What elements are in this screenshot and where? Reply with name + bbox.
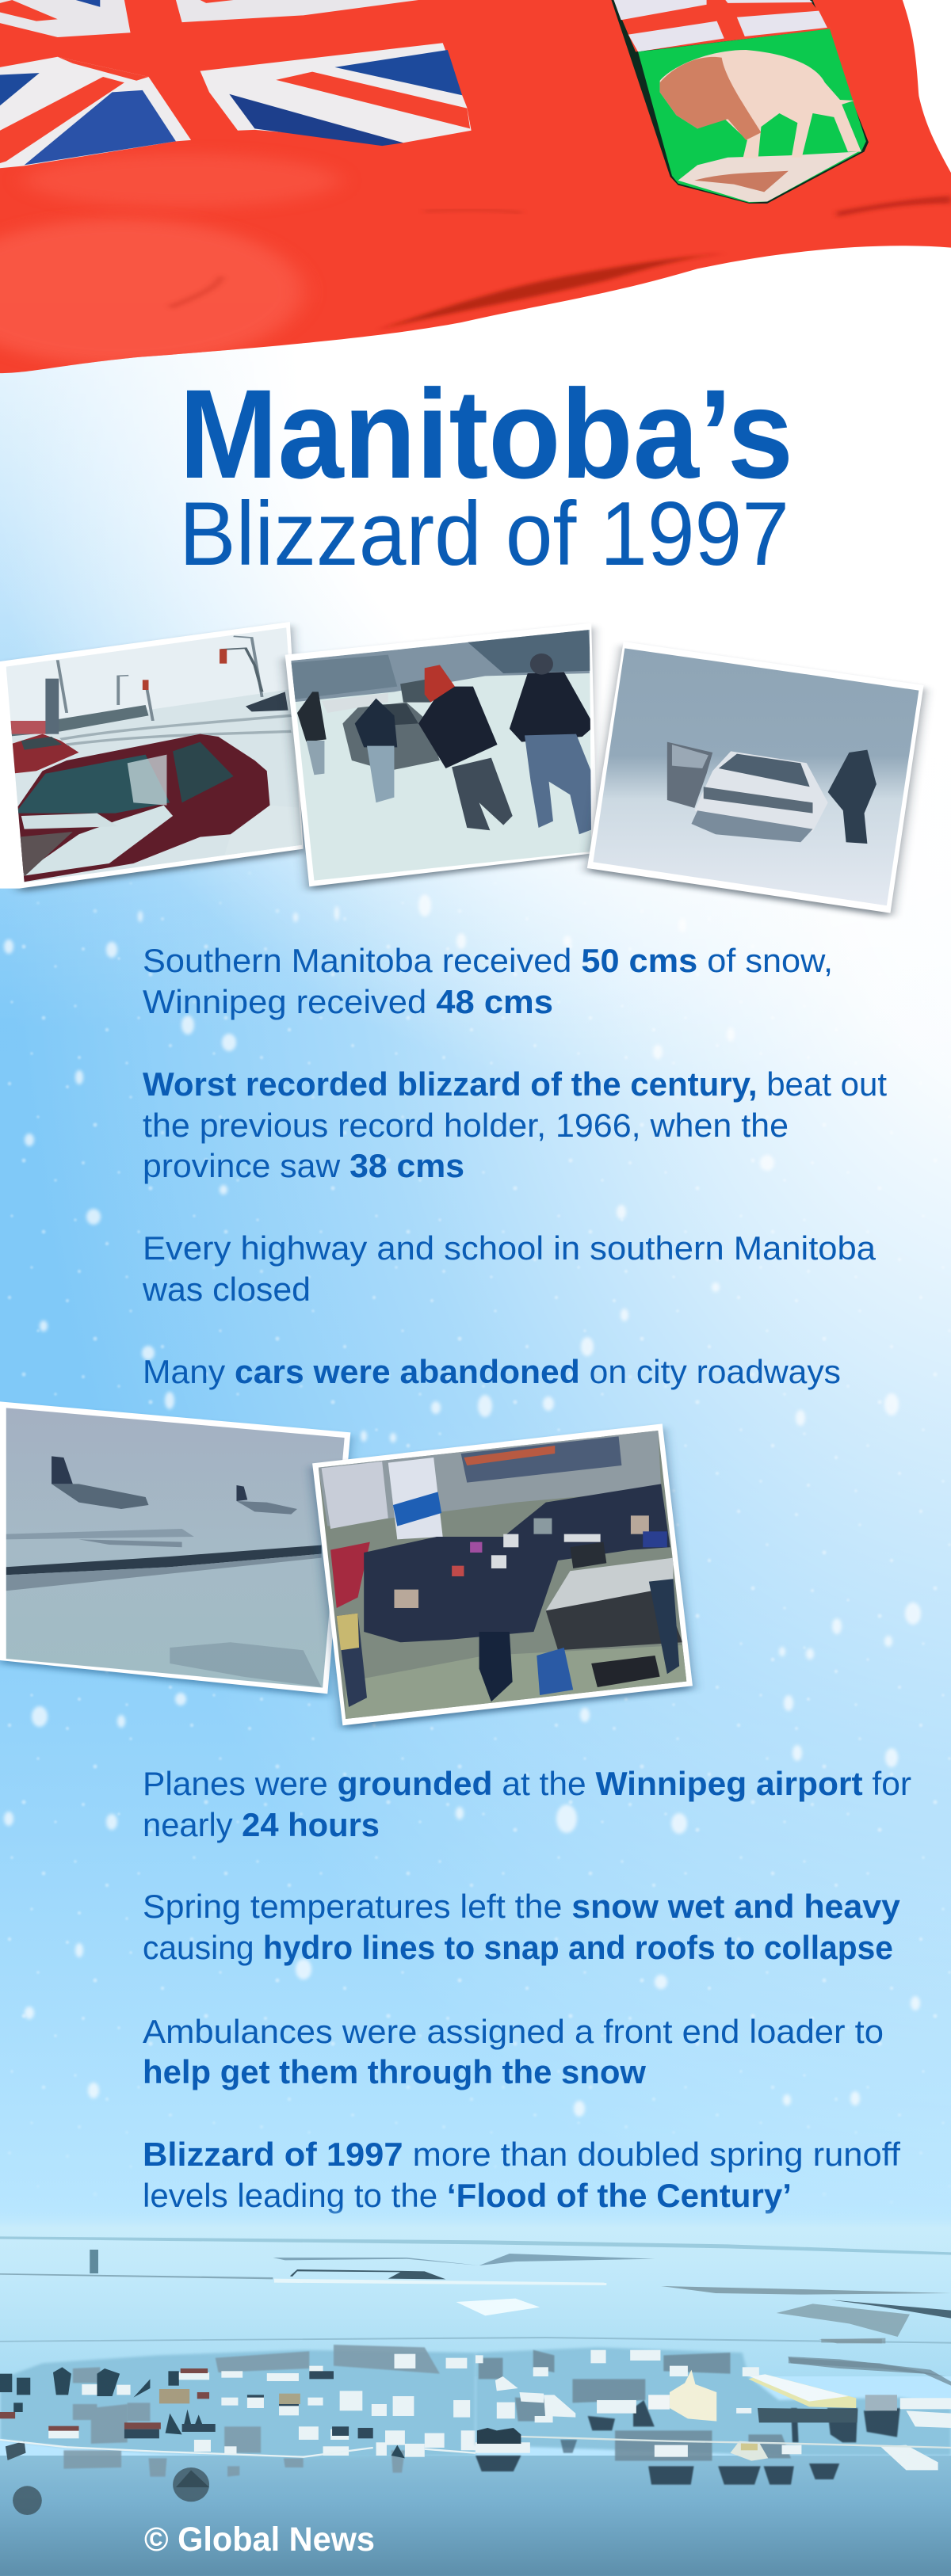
text block: wet heavy snow [143,1888,901,1966]
photo: planes grounded on the runway [0,1401,352,1698]
title [179,363,793,585]
union jack [0,0,472,168]
falling snow [2,870,951,2194]
photo: flooded town [0,2208,951,2576]
photo: crowded airport terminal [312,1423,694,1729]
town: west half [0,2345,476,2487]
flood landscape [0,2208,951,2576]
text block: wet heavy snow: Spring temperatures left the snow wet and heavy [143,1888,901,1925]
photo: red car buried in snow [0,602,315,893]
photo: men pushing a car [285,623,601,890]
text block: planes grounded: Planes were grounded at the Winnipeg airport for [143,1765,911,1802]
text block: closures: was closed [142,1271,311,1308]
text block: worst blizzard [143,1065,887,1184]
text block: planes grounded [143,1765,911,1843]
text block: planes grounded: nearly 24 hours [143,1806,380,1843]
text block: flood of the century [143,2136,900,2214]
text block: ambulances: help get them through the snow [143,2053,646,2090]
text block: flood of the century: Blizzard of 1997 more than doubled spring runoff [143,2136,900,2173]
text block: ambulances [143,2013,884,2090]
photo: stranded car in whiteout [582,642,934,916]
coat of arms shield [611,0,869,204]
text block: wet heavy snow: causing hydro lines to snap and roofs to collapse [143,1929,893,1966]
text block: worst blizzard: Worst recorded blizzard of the century, beat out [143,1065,887,1103]
text block: snowfall: Southern Manitoba received 50 cms of snow, [143,942,833,979]
text block: abandoned cars: Many cars were abandoned on city roadways [143,1353,841,1390]
town: east half [476,2339,951,2485]
text block: closures [142,1229,877,1308]
flood reflections [13,2467,209,2515]
text block: snowfall [143,942,833,1020]
title: Manitoba’s [179,363,793,505]
credit: Global News: © Global News [144,2521,375,2559]
flag shading folds [0,154,951,364]
bison on rock [660,50,861,202]
text block: closures: Every highway and school in southern Manitoba [143,1229,877,1267]
title: Blizzard of 1997 [179,484,789,585]
text block: worst blizzard: the previous record holder, 1966, when the [143,1107,789,1144]
text block: worst blizzard: province saw 38 cms [143,1147,464,1184]
text block: snowfall: Winnipeg received 48 cms [143,983,553,1020]
flag of Manitoba [0,0,951,373]
text block: flood of the century: levels leading to the ‘Flood of the Century’ [143,2177,792,2214]
text block: ambulances: Ambulances were assigned a front end loader to [143,2013,884,2050]
